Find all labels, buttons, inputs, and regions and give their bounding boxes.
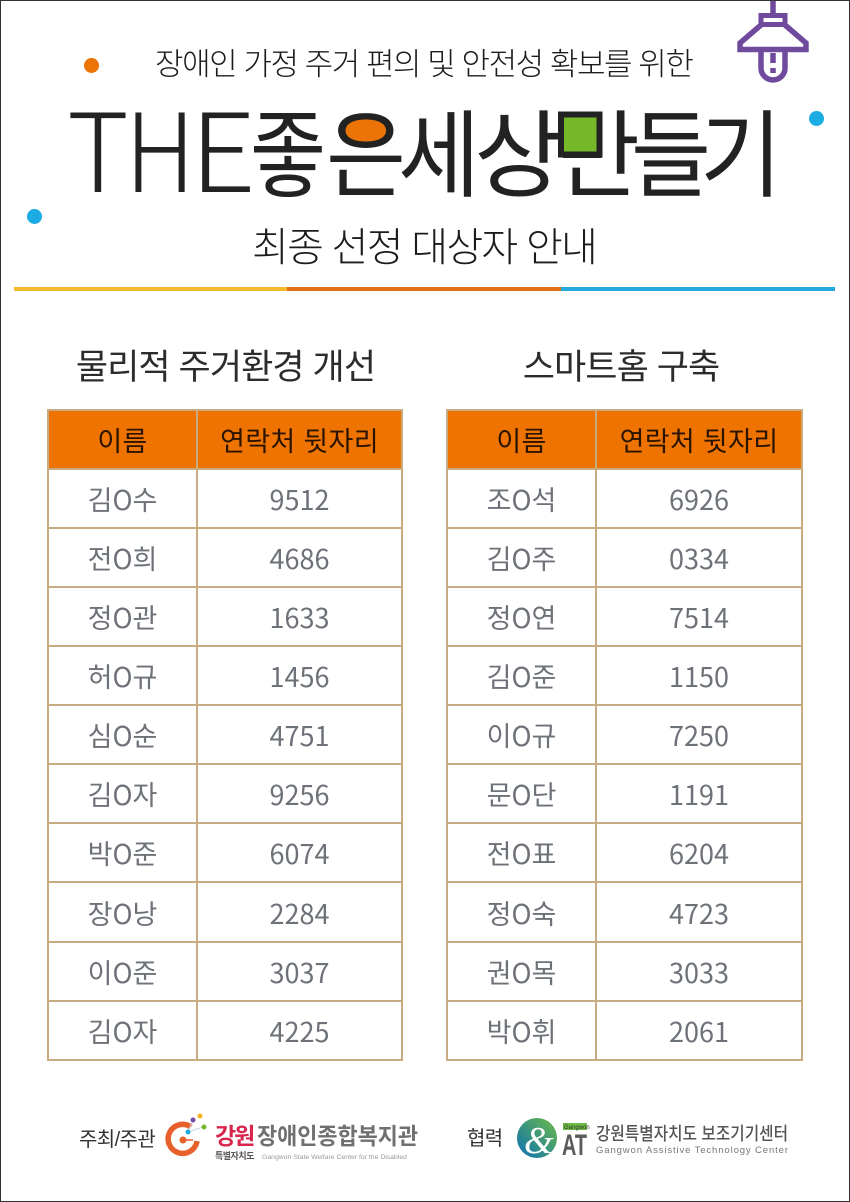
table: physical housing improvement: 9512: [270, 479, 329, 518]
main title: 들: [631, 80, 711, 215]
heading: right table: 스마트홈 구축: [523, 348, 719, 387]
table: physical housing improvement: 김O수: [88, 479, 157, 518]
logo: Gangwon welfare center: 장애인종합복지관: [257, 1123, 418, 1149]
logo: Gangwon welfare center: 강원: [215, 1123, 254, 1149]
tricolor divider: [14, 287, 835, 291]
main title: 기: [700, 80, 782, 215]
table: smart home: 2061: [669, 1011, 729, 1050]
subtitle: 장애인 가정 주거 편의 및 안전성 확보를 위한: [155, 47, 692, 82]
label: host and organizer: 주최/주관: [79, 1129, 155, 1151]
table: smart home: 전O표: [487, 833, 556, 872]
table: smart home: 권O목: [487, 952, 556, 991]
table: smart home: 6204: [669, 833, 729, 872]
table: smart home: 7514: [669, 597, 729, 636]
logo: Gangwon welfare center: Gangwon State Welfare Center for the Disabled: [262, 1155, 407, 1161]
table: physical housing improvement: 4751: [270, 715, 329, 754]
heading: left table: 물리적 주거환경 개선: [76, 348, 375, 387]
main title: 은: [326, 80, 406, 215]
table: smart home: 1150: [669, 656, 729, 695]
table: physical housing improvement: 장O낭: [88, 892, 157, 932]
logo: Gangwon assistive technology center: Gangwon: [564, 1125, 590, 1131]
table: physical housing improvement: 정O관: [88, 597, 157, 636]
table: physical housing improvement: 이O준: [88, 952, 157, 991]
table: physical housing improvement: 1456: [270, 656, 329, 695]
main title: 만: [555, 80, 640, 215]
table: physical housing improvement: 허O규: [88, 656, 157, 695]
table: physical housing improvement: 2284: [270, 892, 329, 932]
table: smart home: 이름: [496, 420, 547, 459]
logo: Gangwon assistive technology center: [517, 1118, 788, 1162]
icon: purple hanging lamp: [737, 1, 809, 83]
table: physical housing improvement: 3037: [270, 952, 329, 991]
logo: Gangwon assistive technology center: &: [524, 1120, 554, 1162]
table: smart home: [446, 409, 803, 1061]
table: smart home: 정O연: [487, 597, 556, 636]
table: smart home: 조O석: [487, 479, 556, 518]
table: physical housing improvement: 김O자: [88, 774, 157, 813]
decorative dot: blue right: [809, 111, 824, 126]
heading: final selection notice: 최종 선정 대상자 안내: [252, 226, 596, 270]
table: smart home: 1191: [669, 774, 729, 813]
table: physical housing improvement: 연락처 뒷자리: [220, 420, 379, 459]
main title: [67, 67, 782, 215]
table: smart home: 6926: [669, 479, 729, 518]
table: physical housing improvement: 전O희: [88, 538, 157, 577]
table: smart home: 4723: [669, 892, 729, 932]
table: smart home: 이O규: [487, 715, 556, 754]
table: physical housing improvement: 박O준: [88, 833, 157, 872]
table: smart home: 3033: [669, 952, 729, 991]
table: smart home: 0334: [669, 538, 729, 577]
main title: 좋: [250, 80, 326, 215]
table: physical housing improvement: 4686: [270, 538, 329, 577]
table: physical housing improvement: 1633: [270, 597, 329, 636]
table: smart home: 김O주: [487, 538, 556, 577]
table: smart home: 정O숙: [487, 892, 556, 932]
main title: 세: [398, 80, 480, 215]
table: physical housing improvement: 6074: [270, 833, 329, 872]
table: smart home: 김O준: [487, 656, 556, 695]
table: physical housing improvement: 김O자: [88, 1011, 157, 1050]
decorative dot: blue left: [27, 209, 42, 224]
table: physical housing improvement: 이름: [97, 420, 148, 459]
table: physical housing improvement: 4225: [270, 1011, 329, 1050]
table: physical housing improvement: [47, 409, 403, 1061]
table: smart home: 박O휘: [487, 1011, 556, 1050]
logo: Gangwon assistive technology center: Gangwon Assistive Technology Center: [596, 1145, 788, 1156]
decorative dot: orange: [84, 58, 99, 73]
logo: Gangwon welfare center: 특별자치도: [215, 1150, 254, 1161]
logo: Gangwon welfare center: [165, 1114, 418, 1161]
logo: Gangwon assistive technology center: AT: [562, 1129, 587, 1162]
table: smart home: 문O단: [487, 774, 556, 813]
table: physical housing improvement: 심O순: [88, 715, 157, 754]
table: smart home: 연락처 뒷자리: [620, 420, 778, 459]
table: smart home: 7250: [669, 715, 729, 754]
main title: 상: [474, 80, 564, 215]
table: physical housing improvement: 9256: [270, 774, 329, 813]
label: cooperation: 협력: [467, 1128, 503, 1150]
